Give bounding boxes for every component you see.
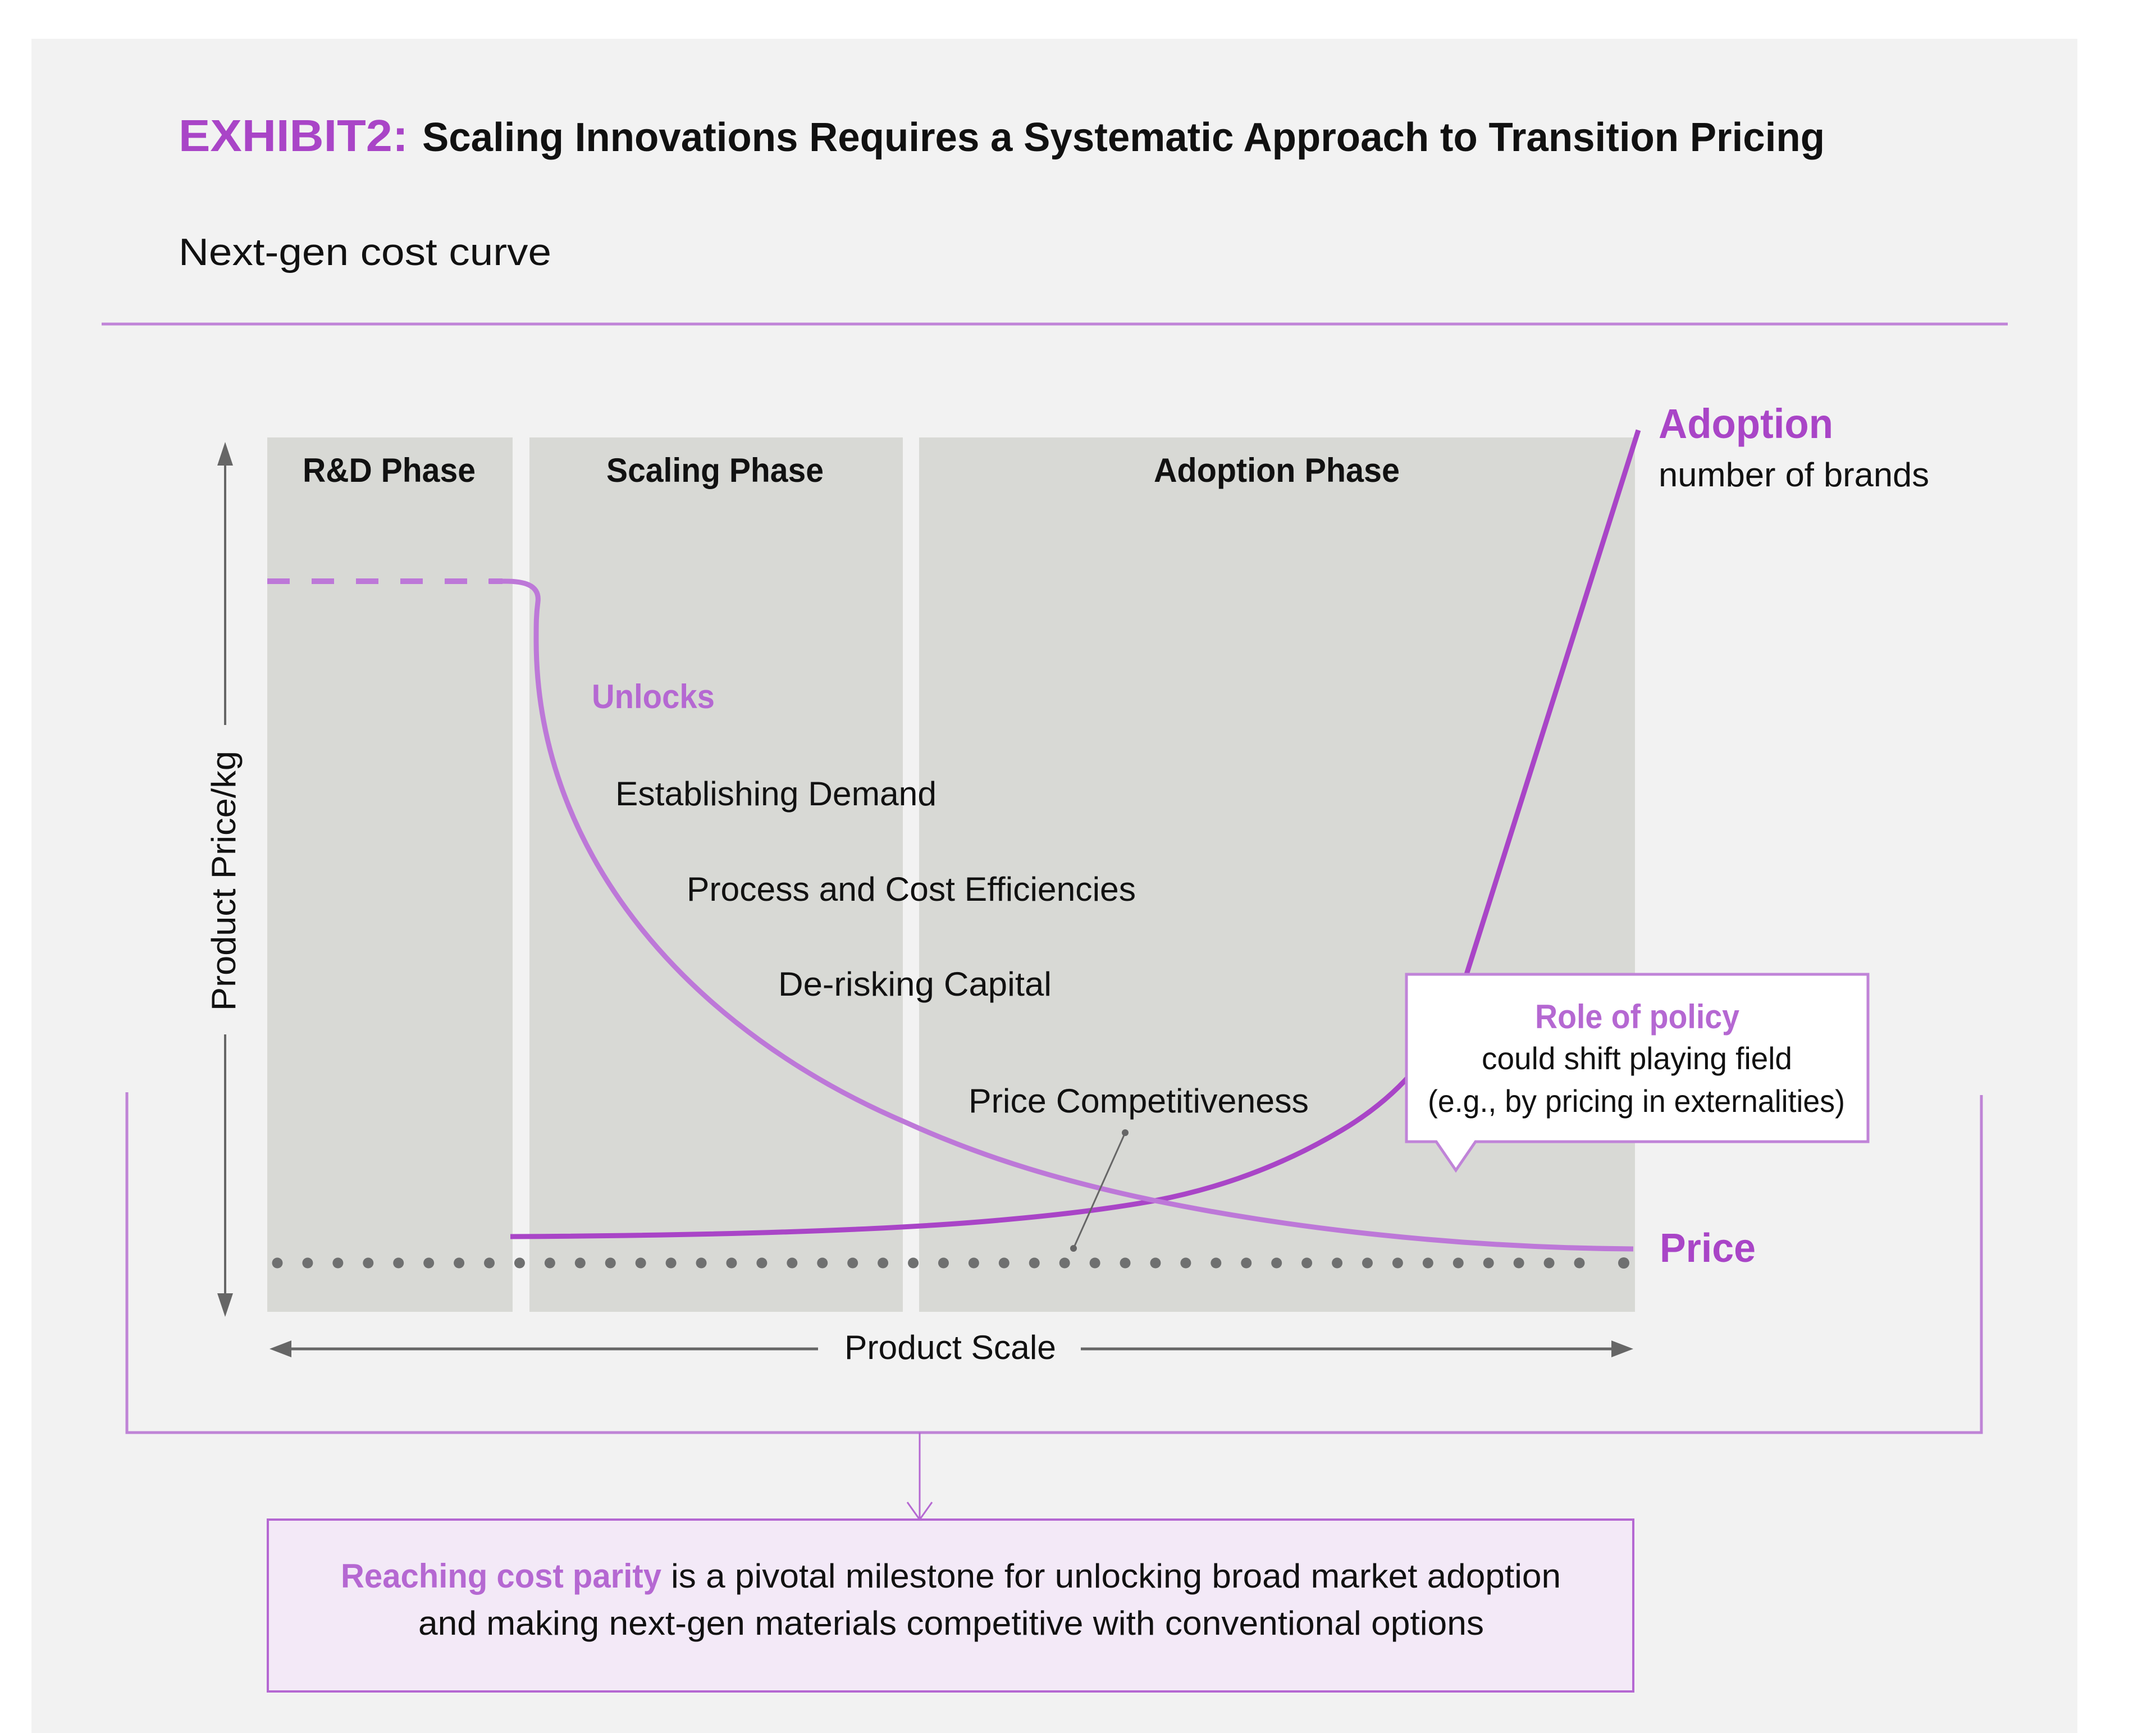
callout: role of policy <box>1406 974 1868 1170</box>
y axis: Product Price/kg: Product Price/kg <box>205 751 243 1011</box>
panel: Adoption phase: Adoption Phase <box>1154 452 1400 489</box>
label: Adoption <box>1659 400 1929 494</box>
panel: Scaling phase: Scaling Phase <box>606 452 824 489</box>
callout: role of policy: could shift playing field <box>1482 1041 1792 1076</box>
callout: role of policy: (e.g., by pricing in externalities) <box>1428 1083 1845 1119</box>
panel: Scaling phase <box>529 437 903 1312</box>
arrow: bracket to conclusion <box>907 1433 932 1520</box>
label: Adoption: number of brands <box>1659 456 1929 494</box>
callout: cost parity conclusion <box>268 1520 1633 1691</box>
bracket <box>127 1092 1981 1433</box>
label: De-risking Capital: De-risking Capital <box>778 965 1052 1003</box>
callout: role of policy: Role of policy <box>1535 998 1740 1036</box>
label: Adoption: Adoption <box>1659 400 1833 447</box>
callout: cost parity conclusion: Reaching cost parity <box>341 1557 662 1595</box>
price curve <box>267 581 1633 1249</box>
subtitle: Next-gen cost curve <box>179 231 551 273</box>
label: Establishing Demand: Establishing Demand <box>615 775 937 813</box>
panel: R&D phase <box>267 437 513 1312</box>
dotted cost parity line <box>277 1257 1629 1269</box>
panel: R&D phase: R&D Phase <box>303 452 476 489</box>
title: EXHIBIT2: <box>179 111 408 161</box>
label: Price: Price <box>1660 1226 1756 1271</box>
label: Price Competitiveness: Price Competitiveness <box>969 1082 1309 1120</box>
panel: Adoption phase <box>919 437 1635 1312</box>
callout: cost parity conclusion: and making next-gen materials competitive with conventional options <box>418 1604 1484 1642</box>
label: Process and Cost Efficiencies: Process and Cost Efficiencies <box>687 870 1136 908</box>
title: Scaling Innovations Requires a Systematic Approach to Transition Pricing <box>422 115 1825 160</box>
callout: cost parity conclusion: is a pivotal milestone for unlocking broad market adoption <box>671 1557 1561 1595</box>
label: Unlocks: Unlocks <box>592 678 715 715</box>
adoption curve <box>510 430 1638 1237</box>
x axis: Product Scale <box>270 1329 1633 1366</box>
y axis: Product Price/kg <box>205 442 243 1317</box>
leader line <box>1070 1129 1129 1252</box>
x axis: Product Scale: Product Scale <box>844 1329 1056 1366</box>
